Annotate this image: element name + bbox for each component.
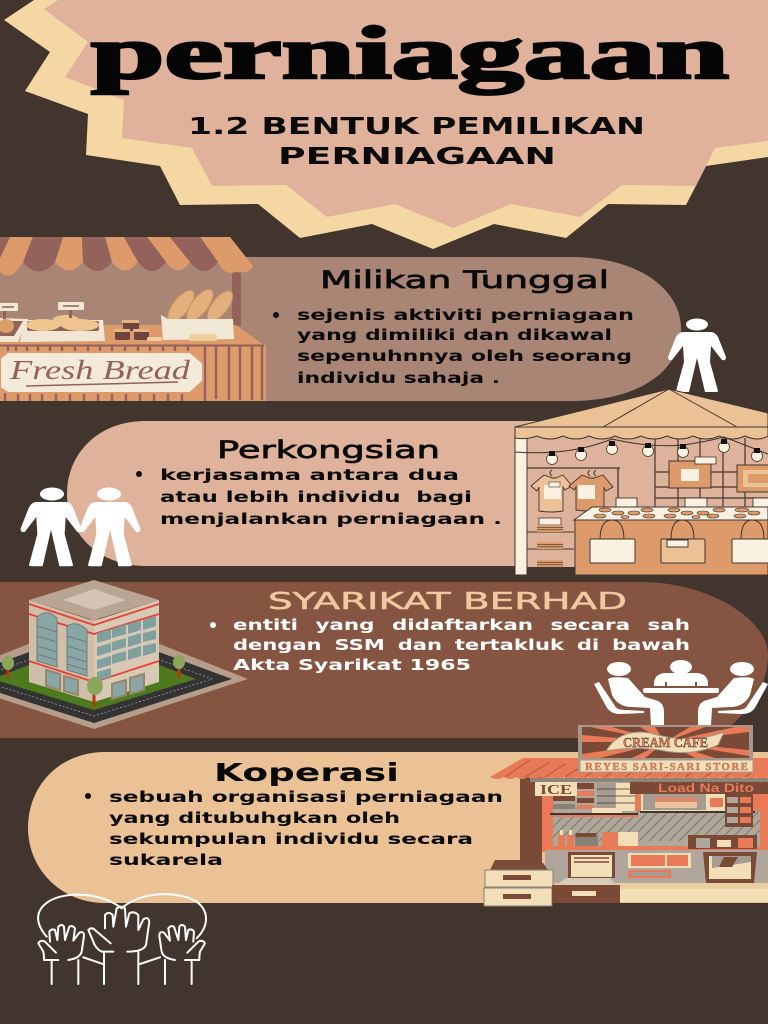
fresh bread sign: Fresh Bread bbox=[9, 355, 191, 385]
ground floor windows bbox=[46, 670, 144, 699]
building right wall bbox=[94, 600, 159, 702]
heading: syarikat berhad: SYARIKAT BERHAD bbox=[268, 589, 627, 615]
text: perkongsian bbox=[136, 466, 502, 528]
string lights bbox=[515, 437, 768, 464]
arched windows bbox=[37, 613, 87, 676]
display grid bbox=[655, 438, 768, 507]
jam jars bbox=[114, 320, 162, 341]
subtitle: 1.2 BENTUK PEMILIKAN bbox=[188, 114, 645, 140]
text: koperasi: yang ditubuhgkan oleh bbox=[109, 809, 400, 827]
icon: market tent stall bbox=[515, 389, 768, 575]
grey counter bbox=[545, 850, 768, 883]
shirt prints bbox=[544, 482, 595, 499]
tote bag three bbox=[732, 520, 768, 563]
drinks and goods bbox=[558, 830, 757, 849]
building left wall bbox=[29, 600, 94, 702]
panel: milikan tunggal bbox=[0, 257, 681, 401]
left pastry tray bbox=[0, 318, 28, 342]
header starburst bbox=[4, 0, 768, 249]
subtitle bbox=[188, 114, 645, 170]
text: koperasi: sekumpulan individu secara bbox=[109, 830, 473, 848]
snack window bbox=[640, 793, 755, 813]
text: koperasi bbox=[85, 788, 503, 869]
store back wall hatch bbox=[553, 811, 760, 847]
store frame bbox=[542, 780, 768, 852]
heart outlines bbox=[38, 894, 206, 938]
icon: office building bbox=[0, 580, 248, 729]
tote bag two bbox=[661, 520, 705, 563]
heading: milikan tunggal: Milikan Tunggal bbox=[320, 266, 609, 294]
counter ledge bbox=[550, 846, 685, 850]
grass bbox=[0, 640, 196, 710]
counter poster two bbox=[628, 853, 691, 878]
store sign: CREAM CAFE bbox=[623, 736, 708, 751]
counter poster three bbox=[703, 852, 757, 883]
icon: bakery stall bbox=[0, 237, 266, 401]
text: perkongsian: menjalankan perniagaan . bbox=[160, 510, 502, 528]
stall post bbox=[232, 270, 241, 326]
ground plot bbox=[0, 618, 248, 729]
starburst outer cream bbox=[4, 0, 768, 249]
hanging shirt one bbox=[531, 475, 572, 512]
table front bbox=[575, 520, 768, 575]
text: syarikat berhad: Akta Syarikat 1965 bbox=[233, 656, 471, 674]
heading: perkongsian: Perkongsian bbox=[217, 436, 440, 464]
tent roof bbox=[515, 389, 768, 439]
text: milikan tunggal bbox=[273, 306, 634, 387]
icon: people at table bbox=[594, 660, 768, 725]
text: koperasi: sukarela bbox=[109, 851, 223, 869]
icon: single person bbox=[668, 318, 726, 392]
framed picture one bbox=[669, 457, 716, 488]
table top with plates bbox=[574, 507, 768, 520]
price tags bbox=[0, 302, 84, 319]
store post bbox=[520, 777, 542, 869]
store sign bbox=[578, 725, 753, 773]
heading: koperasi: Koperasi bbox=[214, 758, 399, 787]
tote bag one bbox=[590, 520, 635, 563]
text: milikan tunggal: individu sahaja . bbox=[297, 369, 500, 387]
starburst inner pink bbox=[44, 0, 768, 228]
text: koperasi: sebuah organisasi perniagaan bbox=[109, 788, 503, 806]
awning bbox=[0, 237, 253, 275]
store sign: REYES SARI-SARI STORE bbox=[585, 761, 748, 773]
tent interior bbox=[515, 427, 768, 567]
base top band bbox=[620, 883, 768, 889]
red stripes bbox=[29, 604, 159, 682]
left hand bbox=[38, 925, 84, 984]
text: syarikat berhad: dengan SSM dan tertakluk di bawah bbox=[233, 636, 690, 654]
bun tray bbox=[20, 315, 105, 342]
cream base bbox=[620, 885, 768, 902]
trees bbox=[2, 655, 185, 707]
panel: koperasi bbox=[28, 752, 768, 903]
text: perkongsian: kerjasama antara dua bbox=[160, 466, 459, 484]
text: syarikat berhad bbox=[210, 616, 690, 674]
table signs bbox=[616, 498, 768, 510]
left post bbox=[515, 438, 527, 575]
folded clothes bbox=[527, 518, 574, 566]
ice sign: ICE bbox=[540, 783, 572, 798]
right wing windows bbox=[97, 616, 156, 681]
middle hand bbox=[83, 907, 160, 984]
crates bbox=[484, 860, 620, 906]
text: milikan tunggal: sejenis aktiviti perniagaan bbox=[297, 306, 634, 324]
text: milikan tunggal: yang dimiliki dan dikawal bbox=[297, 326, 612, 344]
hanging shirt two bbox=[569, 475, 613, 511]
building roof bbox=[29, 580, 159, 620]
icon: sari-sari store bbox=[484, 725, 768, 906]
icon: raised hands in hearts bbox=[38, 894, 206, 984]
subtitle: PERNIAGAAN bbox=[278, 144, 556, 170]
counter poster one bbox=[568, 852, 615, 878]
framed picture two bbox=[737, 465, 768, 492]
panel: perkongsian bbox=[67, 421, 560, 566]
road bbox=[0, 628, 232, 723]
clothes rail bbox=[527, 468, 620, 508]
load na dito sign: Load Na Dito bbox=[658, 781, 754, 795]
text: perkongsian: atau lebih individu bagi bbox=[160, 488, 472, 506]
panel: syarikat berhad bbox=[0, 582, 768, 738]
text: syarikat berhad: entiti yang didaftarkan secara sah bbox=[233, 616, 690, 634]
fresh bread sign bbox=[0, 352, 203, 393]
icon: two people bbox=[21, 488, 140, 566]
text: milikan tunggal: sepenuhnnya oleh seorang bbox=[297, 347, 632, 365]
title: perniagaan bbox=[91, 12, 729, 95]
table top bbox=[0, 325, 264, 345]
upper shelves bbox=[550, 782, 638, 817]
bread box bbox=[161, 285, 237, 341]
hanging goods bbox=[725, 794, 753, 827]
ice sign bbox=[535, 782, 577, 798]
right hand bbox=[159, 925, 205, 984]
awning bbox=[490, 758, 768, 782]
road markings bbox=[0, 636, 212, 716]
load na dito sign bbox=[630, 781, 768, 795]
table front bbox=[0, 345, 266, 401]
table stripes bbox=[0, 346, 264, 401]
window lines bbox=[37, 626, 87, 670]
shirt hangers bbox=[550, 470, 596, 476]
hatch lines bbox=[553, 811, 760, 841]
